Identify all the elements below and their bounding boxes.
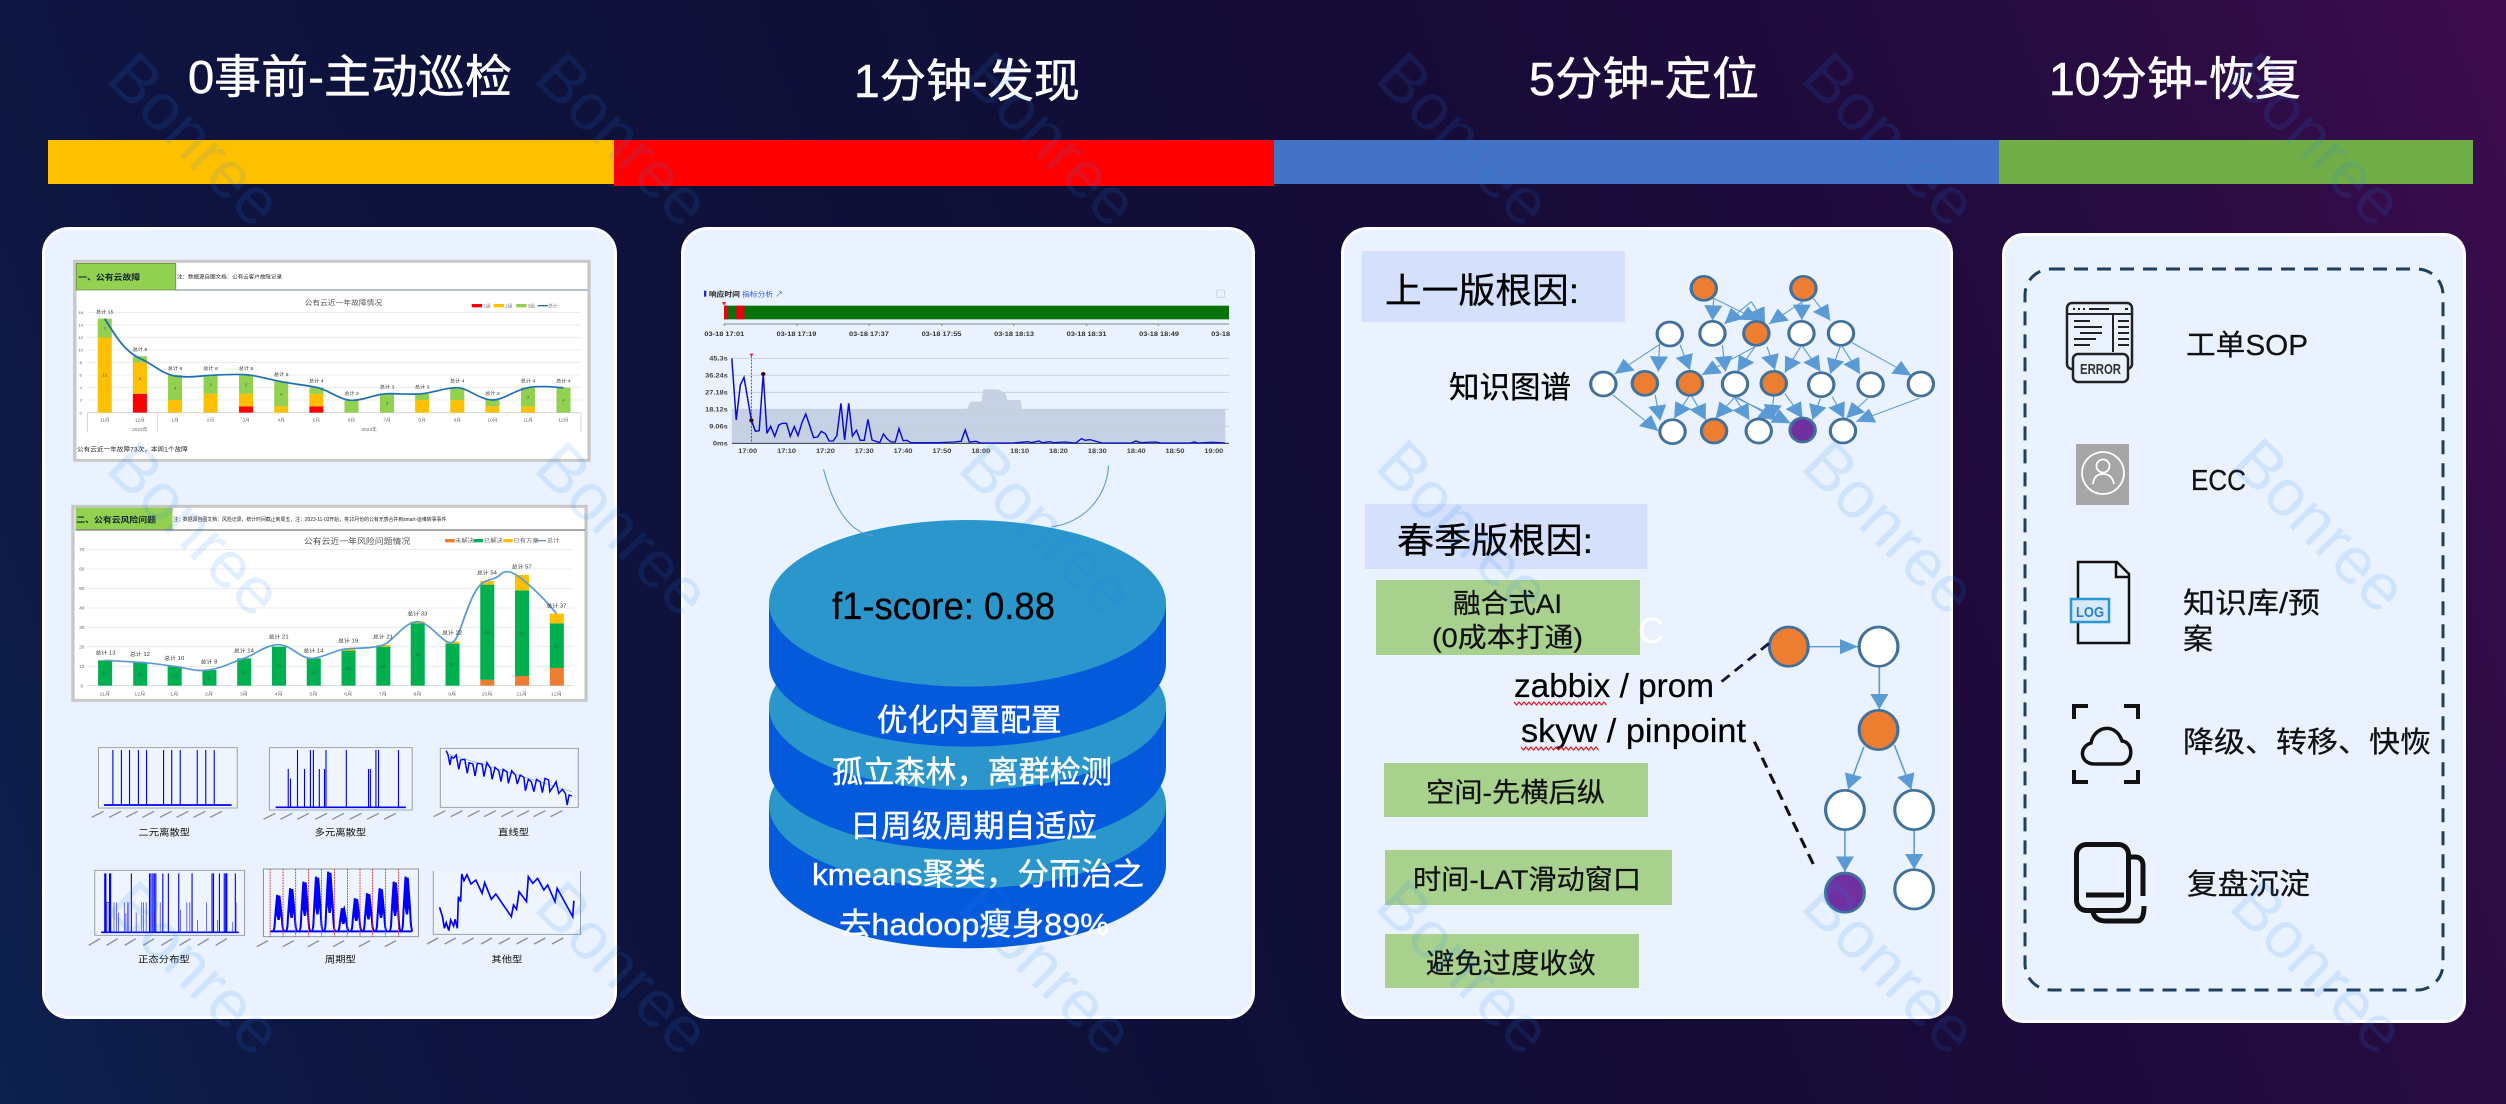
icon: error window: ERROR xyxy=(2080,361,2121,378)
chart: public cloud risk issues: 11月 xyxy=(516,692,527,698)
chart: response time: 36.24s xyxy=(705,373,728,380)
chart: other type xyxy=(427,871,581,966)
chart: public cloud failures: 11月 xyxy=(523,418,533,424)
chart: public cloud failures: 3 xyxy=(386,401,389,406)
chart: public cloud risk issues: 44 xyxy=(519,631,525,636)
watermark: Bonree xyxy=(522,38,725,240)
chart: public cloud failures: 8 xyxy=(79,360,83,365)
watermark: Bonree xyxy=(94,428,297,630)
chart: public cloud risk issues: 总计 37 xyxy=(546,602,566,609)
chart: public cloud failures: 4月 xyxy=(277,418,285,424)
chart: public cloud risk issues: 23 xyxy=(554,644,560,648)
chart: response time: 0ms xyxy=(713,441,728,448)
chart: public cloud failures: 12 xyxy=(78,335,84,340)
chart: public cloud failures: 总计 6 xyxy=(203,365,218,372)
chart: public cloud failures: 2022年 xyxy=(132,426,148,433)
watermark: Bonree xyxy=(94,38,297,240)
chart: response time: 18:10 xyxy=(1010,448,1029,455)
chart: public cloud risk issues: 8 xyxy=(208,676,211,680)
chart: public cloud failures: 3月 xyxy=(242,418,250,424)
chart: public cloud risk issues: 11月 xyxy=(99,692,110,698)
chart: public cloud risk issues: 32 xyxy=(415,652,421,657)
box: converged AI: 融合式AI xyxy=(1453,589,1562,619)
box: avoid over-convergence xyxy=(1385,934,1639,988)
chart: periodic: 周期型 xyxy=(325,953,356,966)
chart: public cloud failures: 4 xyxy=(562,398,565,402)
title: recover in 10 minutes: 10分钟-恢复 xyxy=(2049,53,2301,105)
watermark: Bonree xyxy=(2219,424,2422,626)
chart: public cloud risk issues xyxy=(73,506,586,700)
chart: public cloud failures: 总计 6 xyxy=(168,365,183,372)
box: spatial xyxy=(1384,763,1648,817)
chart: public cloud failures: 2级 xyxy=(505,303,513,309)
chart: public cloud risk issues: 总计 12 xyxy=(130,650,150,658)
chart: public cloud risk issues: 已有方案 xyxy=(514,537,539,545)
label: degrade transfer recover: 降级、转移、快恢 xyxy=(2183,726,2431,759)
chart: public cloud failures: 9月 xyxy=(454,418,461,424)
chart: normal distribution: 正态分布型 xyxy=(138,953,190,966)
chart: response time: 9.06s xyxy=(709,424,728,431)
cylinder labels: 去hadoop瘦身89% xyxy=(839,907,1109,942)
chart: binary discrete: 二元离散型 xyxy=(138,826,190,838)
chart: public cloud failures: 3 xyxy=(209,382,212,387)
label: knowledge base: 案 xyxy=(2183,623,2213,656)
chart: normal distribution xyxy=(89,870,245,966)
box: avoid over-convergence: 避免过度收敛 xyxy=(1426,948,1596,979)
diagram: knowledge graph xyxy=(1591,276,1934,444)
chart: linear trend: 直线型 xyxy=(498,826,529,838)
chart: public cloud failures: 1月 xyxy=(171,418,179,424)
chart: public cloud risk issues: 50 xyxy=(79,586,85,591)
box: converged AI: (0成本打通) xyxy=(1432,623,1583,653)
chart: public cloud risk issues: 总计 10 xyxy=(164,654,184,662)
chart: public cloud failures: 总计 3 xyxy=(415,384,430,391)
chart: public cloud risk issues: 未解决 xyxy=(455,537,474,545)
chart: public cloud risk issues: 总计 21 xyxy=(269,633,289,641)
chart: public cloud failures: 公有云近一年故障情况 xyxy=(305,298,383,307)
panel: root cause location xyxy=(1342,228,1952,1018)
chart: public cloud failures: 总计 15 xyxy=(96,309,114,316)
chart: response time: 18.12s xyxy=(705,407,728,414)
chart: public cloud failures: 11月 xyxy=(100,418,110,424)
chart: public cloud risk issues: 6月 xyxy=(344,692,352,698)
chart: public cloud risk issues: 14 xyxy=(311,670,317,675)
chart: public cloud risk issues: 3月 xyxy=(240,692,248,698)
chart: public cloud failures: 总计 2 xyxy=(485,390,500,397)
icon: ECC user xyxy=(2076,444,2129,505)
watermark: Bonree xyxy=(2215,38,2418,240)
chart: public cloud risk issues: 总计 57 xyxy=(512,563,532,571)
chart: response time: 18:40 xyxy=(1127,448,1146,455)
watermark: Bonree xyxy=(1363,866,1566,1068)
watermark: Bonree xyxy=(950,38,1153,240)
chart: response time: 17:10 xyxy=(777,448,796,455)
chart: public cloud risk issues: 总计 21 xyxy=(373,633,393,641)
chart: public cloud risk issues: 21 xyxy=(449,662,455,667)
chart: public cloud failures: 总计 4 xyxy=(309,378,324,384)
chart: public cloud risk issues: 12 xyxy=(137,672,143,677)
chart: public cloud risk issues: 12月 xyxy=(551,692,562,698)
chart: public cloud failures: 7月 xyxy=(383,418,391,424)
chart: response time: 03-18 xyxy=(1211,331,1230,338)
heading: spring release root cause: 春季版根因: xyxy=(1397,522,1593,561)
chart: public cloud risk issues: 8月 xyxy=(413,692,421,698)
title: proactive inspection: 0事前-主动巡检 xyxy=(188,51,512,103)
chart: public cloud failures: 16 xyxy=(78,310,84,315)
chart: public cloud risk issues: 公有云近一年风险问题情况 xyxy=(304,536,411,546)
chart: public cloud failures: 总计 4 xyxy=(521,378,536,384)
cylinder labels: 日周级周期自适应 xyxy=(850,809,1097,844)
chart: public cloud risk issues: 总计 13 xyxy=(95,649,116,656)
chart: public cloud risk issues: 20 xyxy=(380,664,386,669)
connector arcs xyxy=(824,466,1108,536)
chart: public cloud failures: 6 xyxy=(79,373,83,378)
label: knowledge base: 知识库/预 xyxy=(2183,587,2320,620)
chart: public cloud risk issues: 4月 xyxy=(275,692,283,698)
chart: public cloud risk issues: 9月 xyxy=(448,692,456,698)
chart: public cloud failures: 5月 xyxy=(313,418,320,424)
chart: response time: 17:50 xyxy=(932,448,951,455)
chart: public cloud failures: 10 xyxy=(78,348,84,353)
chart: public cloud risk issues: 总计 19 xyxy=(338,637,358,645)
cylinder labels: 优化内置配置 xyxy=(877,703,1062,738)
chart: public cloud risk issues: 2月 xyxy=(205,692,213,698)
chart: public cloud failures: 4 xyxy=(174,386,177,390)
chart: public cloud failures: 注：数据源自图文档：公有云客户故障记录 xyxy=(177,273,283,280)
chart: public cloud failures: 12 xyxy=(102,373,108,378)
chart: public cloud risk issues: 12月 xyxy=(134,692,145,698)
heading: previous root cause xyxy=(1362,251,1625,322)
chart: other type: 其他型 xyxy=(491,953,523,966)
chart: public cloud failures: 4 xyxy=(280,392,283,396)
label: ticket SOP: 工单SOP xyxy=(2186,329,2308,362)
watermark: Bonree xyxy=(1789,38,1992,240)
chart: response time: 19:00 xyxy=(1204,448,1223,455)
label: knowledge graph: 知识图谱 xyxy=(1449,371,1571,405)
chart: public cloud risk issues: 二、公有云风险问题 xyxy=(76,515,157,524)
label: knowledge base xyxy=(2183,587,2320,656)
chart: public cloud risk issues: 总计 22 xyxy=(442,629,462,636)
chart: public cloud risk issues: 49 xyxy=(484,630,490,635)
watermark: Bonree xyxy=(1789,866,1992,1068)
chart: public cloud risk issues: 0 xyxy=(80,684,84,688)
chart: public cloud failures: 0 xyxy=(79,411,83,415)
chart: response time xyxy=(704,290,1230,455)
chart: response time: 03-18 18:31 xyxy=(1067,331,1107,338)
chart: public cloud risk issues: 总计 33 xyxy=(407,610,427,618)
chart: response time: 18:20 xyxy=(1049,448,1068,455)
chart: public cloud risk issues: 总计 xyxy=(547,537,559,545)
diagram: call tree xyxy=(1722,627,1934,912)
watermark: Bonree xyxy=(946,867,1149,1069)
chart: public cloud risk issues: 40 xyxy=(79,606,85,611)
chart: response time: 17:00 xyxy=(738,448,757,455)
chart: public cloud failures: 3 xyxy=(104,326,107,330)
chart: public cloud risk issues: 20 xyxy=(79,645,85,649)
chart: public cloud failures: 12月 xyxy=(558,418,569,424)
box: converged AI xyxy=(1376,580,1640,655)
cylinder labels: kmeans聚类，分而治之 xyxy=(812,857,1144,892)
chart: response time: 17:30 xyxy=(855,448,874,455)
chart: public cloud risk issues: 注：数据源自图文档：风险记录，统计时间截止到周五，注：2023-11-03开始，将10月份的公有无感合并到smart-运维转事事件 xyxy=(173,515,447,523)
title: discover in 1 minute: 1分钟-发现 xyxy=(854,55,1080,107)
chart: public cloud failures: 总计 3 xyxy=(380,384,395,391)
dashed frame xyxy=(2025,269,2443,990)
icon: log file: LOG xyxy=(2076,604,2104,621)
chart: public cloud risk issues: 13 xyxy=(102,671,108,676)
chart: public cloud risk issues: 总计 14 xyxy=(234,647,254,654)
heading: previous root cause: 上一版根因: xyxy=(1385,272,1579,311)
chart: response time: 17:20 xyxy=(816,448,835,455)
chart: public cloud failures: 公有云近一年故障73次，本周1个故障 xyxy=(77,445,189,454)
chart: public cloud risk issues: 30 xyxy=(79,625,85,630)
watermark: Bonree xyxy=(522,428,725,630)
chart: public cloud failures: 3级 xyxy=(528,303,536,309)
icon: cloud scan xyxy=(2074,706,2138,782)
text: zabbix prom: skyw / pinpoint xyxy=(1521,712,1746,749)
chart: public cloud failures xyxy=(75,261,589,460)
text: zabbix prom xyxy=(1514,667,1746,750)
chart: public cloud risk issues: 14 xyxy=(241,670,247,675)
chart: public cloud failures: 2月 xyxy=(207,418,214,424)
label: ECC: ECC xyxy=(2191,465,2246,497)
panel: recovery xyxy=(2004,234,2464,1022)
label: review: 复盘沉淀 xyxy=(2187,868,2310,901)
chart: response time: 17:40 xyxy=(894,448,913,455)
chart: public cloud failures: 总计 4 xyxy=(450,378,465,384)
chart: public cloud risk issues: 总计 8 xyxy=(201,658,217,666)
watermark: Bonree xyxy=(1363,38,1566,240)
box: temporal xyxy=(1385,850,1672,905)
chart: public cloud risk issues: 1月 xyxy=(170,692,178,698)
chart: response time: 03-18 17:19 xyxy=(777,331,816,338)
chart: response time: 03-18 17:55 xyxy=(922,331,962,338)
chart: public cloud failures: 3 xyxy=(245,382,248,387)
chart: public cloud failures: 8月 xyxy=(418,418,426,424)
chart: response time: 03-18 17:01 xyxy=(704,331,744,338)
chart: response time: 响应时间 xyxy=(709,290,740,298)
chart: response time: 03-18 17:37 xyxy=(849,331,889,338)
chart: public cloud failures: 6月 xyxy=(348,418,355,424)
box: spatial: 空间-先横后纵 xyxy=(1426,778,1605,808)
chart: response time: 03-18 18:49 xyxy=(1139,331,1179,338)
chart: multi-value discrete: 多元离散型 xyxy=(315,826,366,838)
chart: public cloud failures: 总计 9 xyxy=(133,346,147,353)
chart: public cloud failures: 12月 xyxy=(135,418,145,424)
chart: public cloud failures: 总计 xyxy=(548,303,558,309)
chart: public cloud failures: 5 xyxy=(139,376,142,381)
chart: multi-value discrete xyxy=(263,748,412,838)
chart: binary discrete xyxy=(92,748,237,838)
watermark: Bonree xyxy=(2217,866,2420,1068)
box: temporal: 时间-LAT滑动窗口 xyxy=(1413,865,1641,895)
chart: response time: 18:50 xyxy=(1166,448,1185,455)
chart: public cloud failures: 2 xyxy=(79,398,83,403)
chart: response time: 18:00 xyxy=(971,448,990,455)
icon: copy document xyxy=(2076,844,2144,921)
chart: public cloud failures: 2023年 xyxy=(362,426,377,433)
panel: proactive inspection xyxy=(44,228,616,1018)
chart: response time: 03-18 18:13 xyxy=(994,331,1034,338)
chart: public cloud failures: 总计 6 xyxy=(239,365,254,372)
cylinder labels: 孤立森林，离群检测 xyxy=(832,755,1112,790)
panel: discovery xyxy=(682,228,1254,1018)
chart: public cloud risk issues: 10月 xyxy=(481,692,492,698)
cylinder labels xyxy=(812,703,1144,942)
chart: public cloud risk issues: 5月 xyxy=(309,692,318,698)
chart: public cloud failures: 14 xyxy=(78,323,84,328)
watermark: Bonree xyxy=(1363,426,1566,628)
chart: public cloud risk issues: 10 xyxy=(172,674,177,679)
icon: error window xyxy=(2067,303,2132,382)
chart: public cloud failures: 10月 xyxy=(487,418,498,424)
watermark: Bonree xyxy=(946,428,1149,630)
chart: public cloud failures: 总计 4 xyxy=(556,378,571,384)
timeline bar xyxy=(48,140,2473,186)
chart: public cloud failures: 4 xyxy=(79,385,83,390)
chart: public cloud risk issues: 总计 14 xyxy=(303,647,323,654)
watermark: Bonree xyxy=(94,867,297,1069)
title: locate in 5 minutes: 5分钟-定位 xyxy=(1529,53,1759,105)
chart: public cloud failures: 总计 2 xyxy=(344,390,359,397)
cylinder stack xyxy=(769,520,1166,948)
stage titles xyxy=(188,51,2301,107)
chart: response time: 18:30 xyxy=(1088,448,1107,455)
chart: public cloud risk issues: 70 xyxy=(79,547,85,552)
heading: spring release root cause xyxy=(1365,504,1647,569)
chart: public cloud failures: 3 xyxy=(527,395,530,399)
chart: linear trend xyxy=(434,748,578,838)
chart: response time: 27.18s xyxy=(705,390,728,397)
chart: periodic xyxy=(257,869,418,966)
chart: public cloud failures: 总计 5 xyxy=(274,371,289,378)
chart: public cloud risk issues: 10 xyxy=(79,664,85,669)
watermark: Bonree xyxy=(1789,426,1992,628)
chart: public cloud risk issues: 18 xyxy=(346,666,351,671)
chart: public cloud risk issues: 7月 xyxy=(379,692,387,698)
chart: public cloud risk issues: 60 xyxy=(79,567,85,572)
ghost letter: C xyxy=(1638,610,1664,651)
f1 score: f1-score: 0.88 xyxy=(832,586,1055,628)
chart: public cloud risk issues: 21 xyxy=(276,664,282,668)
text: zabbix prom: zabbix / prom xyxy=(1514,667,1714,704)
chart: public cloud failures: 1级 xyxy=(483,303,491,309)
chart: response time: 指标分析 ↗ xyxy=(742,290,783,298)
chart: public cloud failures: 一、公有云故障 xyxy=(78,272,141,282)
chart: public cloud risk issues: 总计 54 xyxy=(477,569,497,577)
icon: log file xyxy=(2071,562,2129,643)
watermark: Bonree xyxy=(522,867,725,1069)
chart: response time: 45.3s xyxy=(709,356,728,363)
chart: public cloud risk issues: 已解决 xyxy=(484,537,503,545)
